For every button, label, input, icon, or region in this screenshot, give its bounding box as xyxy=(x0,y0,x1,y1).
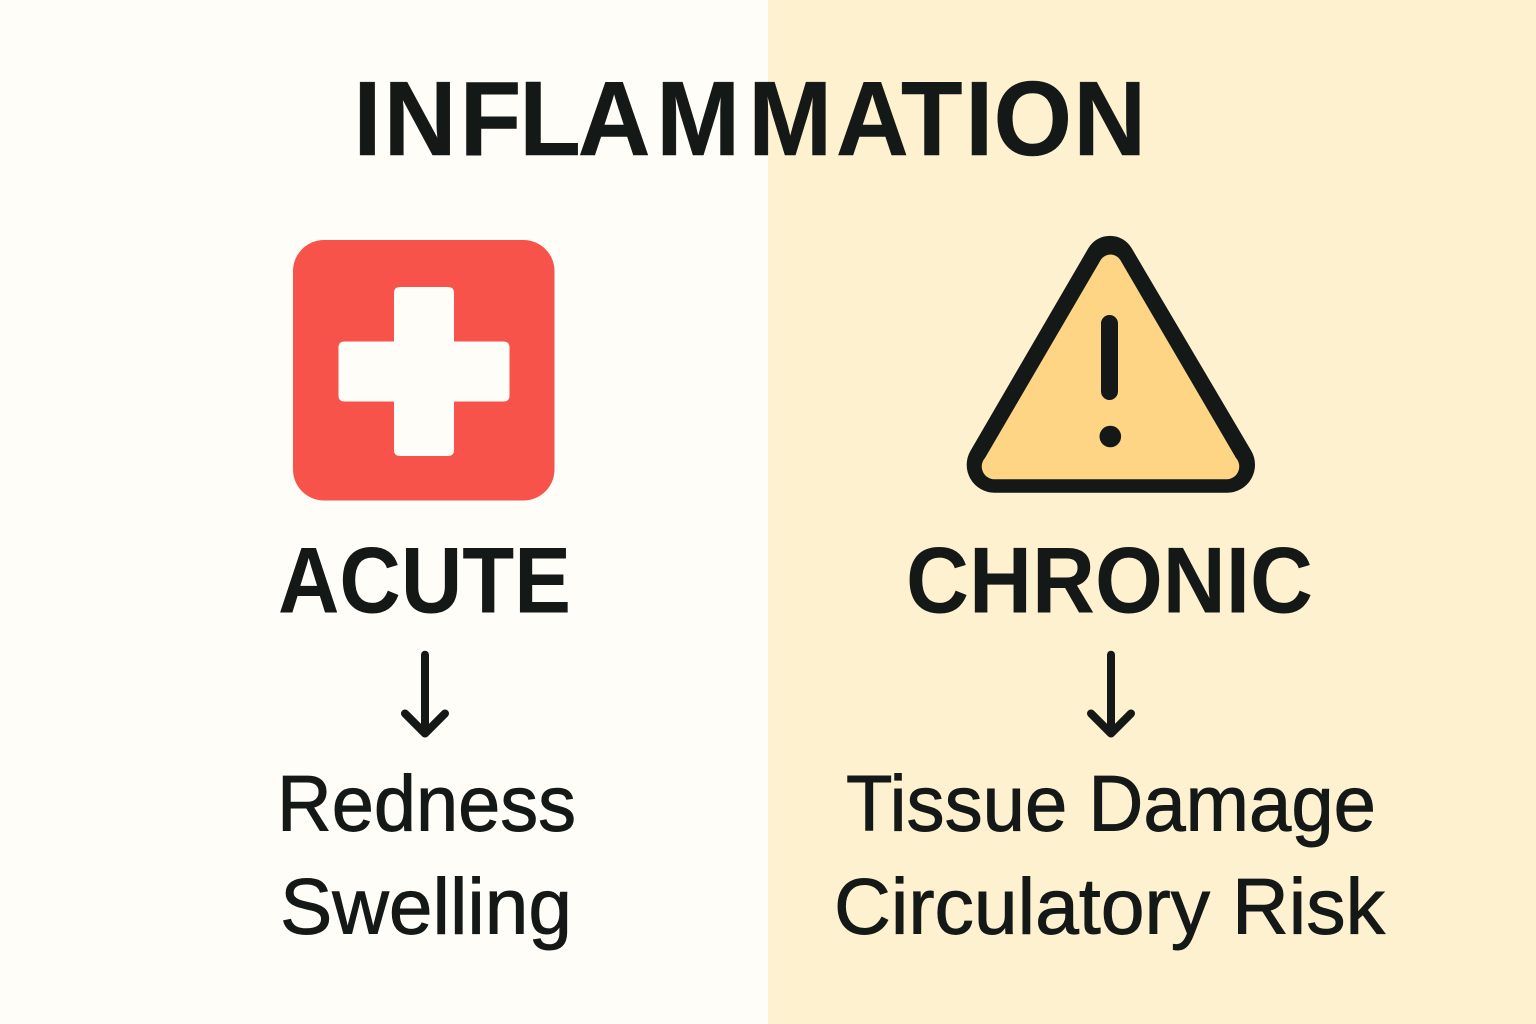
text: acute effects: Redness xyxy=(277,758,576,848)
icon: red medical cross xyxy=(293,240,554,500)
text: chronic effects: Tissue Damage xyxy=(846,758,1376,848)
heading: chronic: CHRONIC xyxy=(906,528,1313,632)
icon: warning triangle xyxy=(967,236,1255,493)
arrow: chronic xyxy=(1091,655,1131,734)
text: acute effects: Swelling xyxy=(280,862,572,950)
text: chronic effects: Circulatory Risk xyxy=(834,862,1385,950)
heading: acute: ACUTE xyxy=(278,528,571,632)
panel: acute background xyxy=(0,0,768,1024)
text: acute effects xyxy=(277,758,576,950)
arrow: acute xyxy=(405,655,445,734)
text: chronic effects xyxy=(834,758,1385,950)
panel: chronic background xyxy=(768,0,1536,1024)
title: INFLAMMATION xyxy=(353,59,1146,178)
